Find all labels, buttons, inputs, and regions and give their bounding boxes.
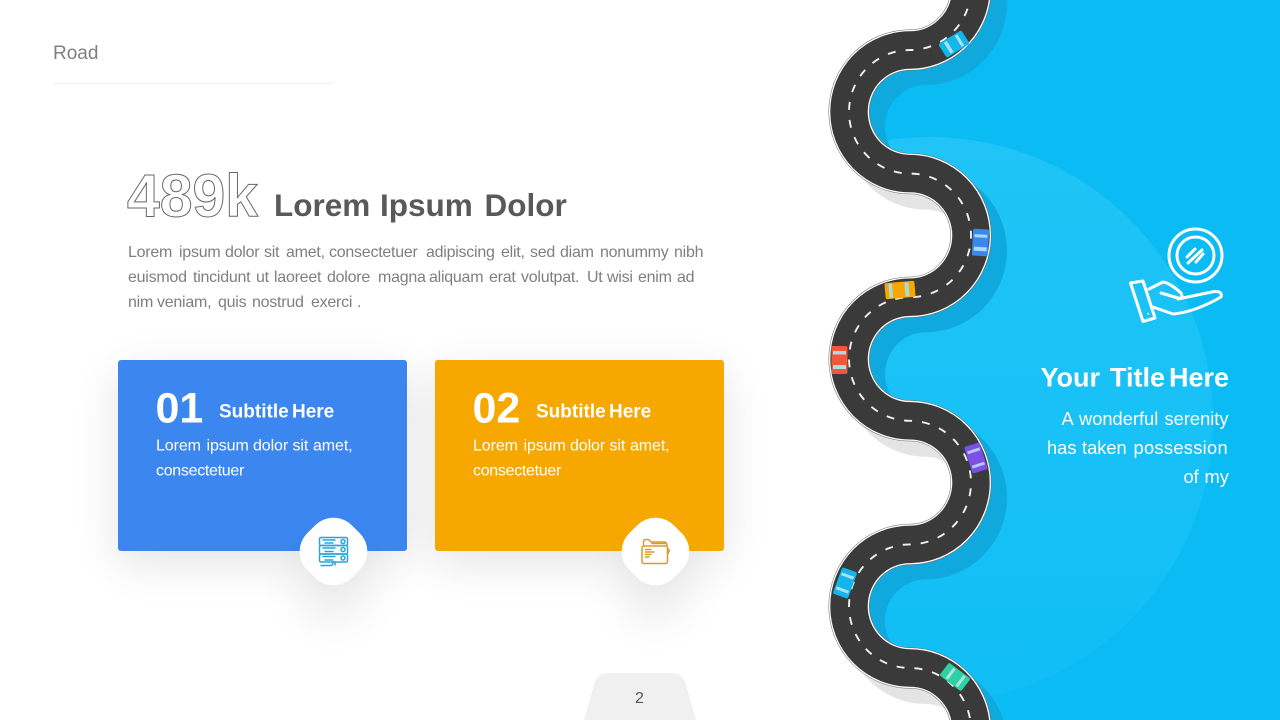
card 02 text: dolor <box>570 438 606 454</box>
body text: dolor <box>225 244 260 261</box>
body text: enim <box>638 269 672 286</box>
body text <box>128 244 703 311</box>
header label: Road <box>53 43 98 64</box>
card 01 subtitle: Subtitle <box>219 402 289 422</box>
body text: . <box>357 294 361 311</box>
card 02 text: sit <box>610 438 626 454</box>
body text: adipiscing <box>426 244 495 261</box>
card 01 text <box>156 438 353 480</box>
body text: Lorem <box>128 244 172 261</box>
body text: tincidunt <box>193 269 251 286</box>
heading: Lorem <box>274 187 370 223</box>
body text: laoreet <box>274 269 322 286</box>
card 01 text: ipsum <box>206 438 249 454</box>
panel text <box>1047 408 1230 487</box>
card 02 text: amet, <box>630 438 670 454</box>
body text: diam <box>560 244 594 261</box>
body text: exerci <box>311 294 352 311</box>
car: green <box>939 662 971 692</box>
card 02 text: Lorem <box>473 438 518 454</box>
panel text: serenity <box>1164 408 1229 429</box>
body text: nim <box>128 294 153 311</box>
panel text: possession <box>1134 437 1228 458</box>
body text: quis <box>218 294 247 311</box>
body text: aliquam <box>429 269 483 286</box>
body text: nibh <box>674 244 703 261</box>
body text: sed <box>530 244 555 261</box>
card 02 text: ipsum <box>524 438 566 454</box>
heading: Dolor <box>484 187 567 223</box>
card 01 text: Lorem <box>156 438 201 454</box>
body text: sit <box>264 244 280 261</box>
card 01 text: dolor <box>253 438 289 454</box>
panel: card 02 <box>435 360 724 551</box>
body text: ut <box>256 269 270 286</box>
body text: consectetuer <box>329 244 419 261</box>
icon: hand holding coin <box>1130 229 1222 322</box>
page number tab: 2 <box>635 690 644 707</box>
card 02 number: 02 <box>472 385 520 433</box>
car: orange <box>884 281 916 299</box>
body text: volutpat. <box>521 269 579 286</box>
panel text: A <box>1062 408 1074 429</box>
card 02 subtitle: Subtitle <box>536 402 606 422</box>
body text: Ut <box>587 269 603 286</box>
body text: magna <box>378 269 426 286</box>
road <box>849 0 971 720</box>
card 02 text: consectetuer <box>473 462 562 480</box>
panel text: of <box>1184 466 1200 487</box>
body text: nonummy <box>600 244 669 261</box>
body text: ad <box>677 269 694 286</box>
heading: Ipsum <box>380 187 473 223</box>
car: light blue <box>833 567 857 599</box>
card 02 subtitle: Here <box>609 402 651 422</box>
badge: folder <box>611 506 700 596</box>
car: blue <box>972 229 989 256</box>
car: cyan top <box>938 30 970 58</box>
car: red <box>832 346 848 374</box>
heading <box>274 187 567 223</box>
road graphic with blue panel <box>828 0 1280 720</box>
body text: ipsum <box>179 244 220 261</box>
panel text: has <box>1047 437 1076 458</box>
card 01 subtitle: Here <box>292 402 334 422</box>
panel: card 01 <box>118 360 407 551</box>
panel title <box>1040 363 1229 393</box>
car: purple <box>964 442 988 474</box>
panel title: Here <box>1169 363 1229 393</box>
body text: nostrud <box>252 294 304 311</box>
card 02 text <box>473 438 670 480</box>
body text: euismod <box>128 269 187 286</box>
body text: amet, <box>286 244 325 261</box>
body text: wisi <box>606 269 633 286</box>
panel title: Title <box>1110 363 1165 393</box>
body text: veniam, <box>157 294 211 311</box>
panel text: my <box>1204 466 1230 487</box>
body text: dolore <box>327 269 370 286</box>
panel text: taken <box>1082 437 1127 458</box>
body text: elit, <box>501 244 525 261</box>
big number: 489k <box>127 162 259 230</box>
badge: server <box>289 506 378 596</box>
card 01 text: amet, <box>313 438 353 454</box>
panel title: Your <box>1040 363 1100 393</box>
card 01 text: sit <box>292 438 309 454</box>
body text: erat <box>489 269 516 286</box>
card 01 text: consectetuer <box>156 462 245 480</box>
card 01 number: 01 <box>156 385 203 433</box>
panel text: wonderful <box>1078 408 1158 429</box>
blue panel <box>870 0 1280 720</box>
